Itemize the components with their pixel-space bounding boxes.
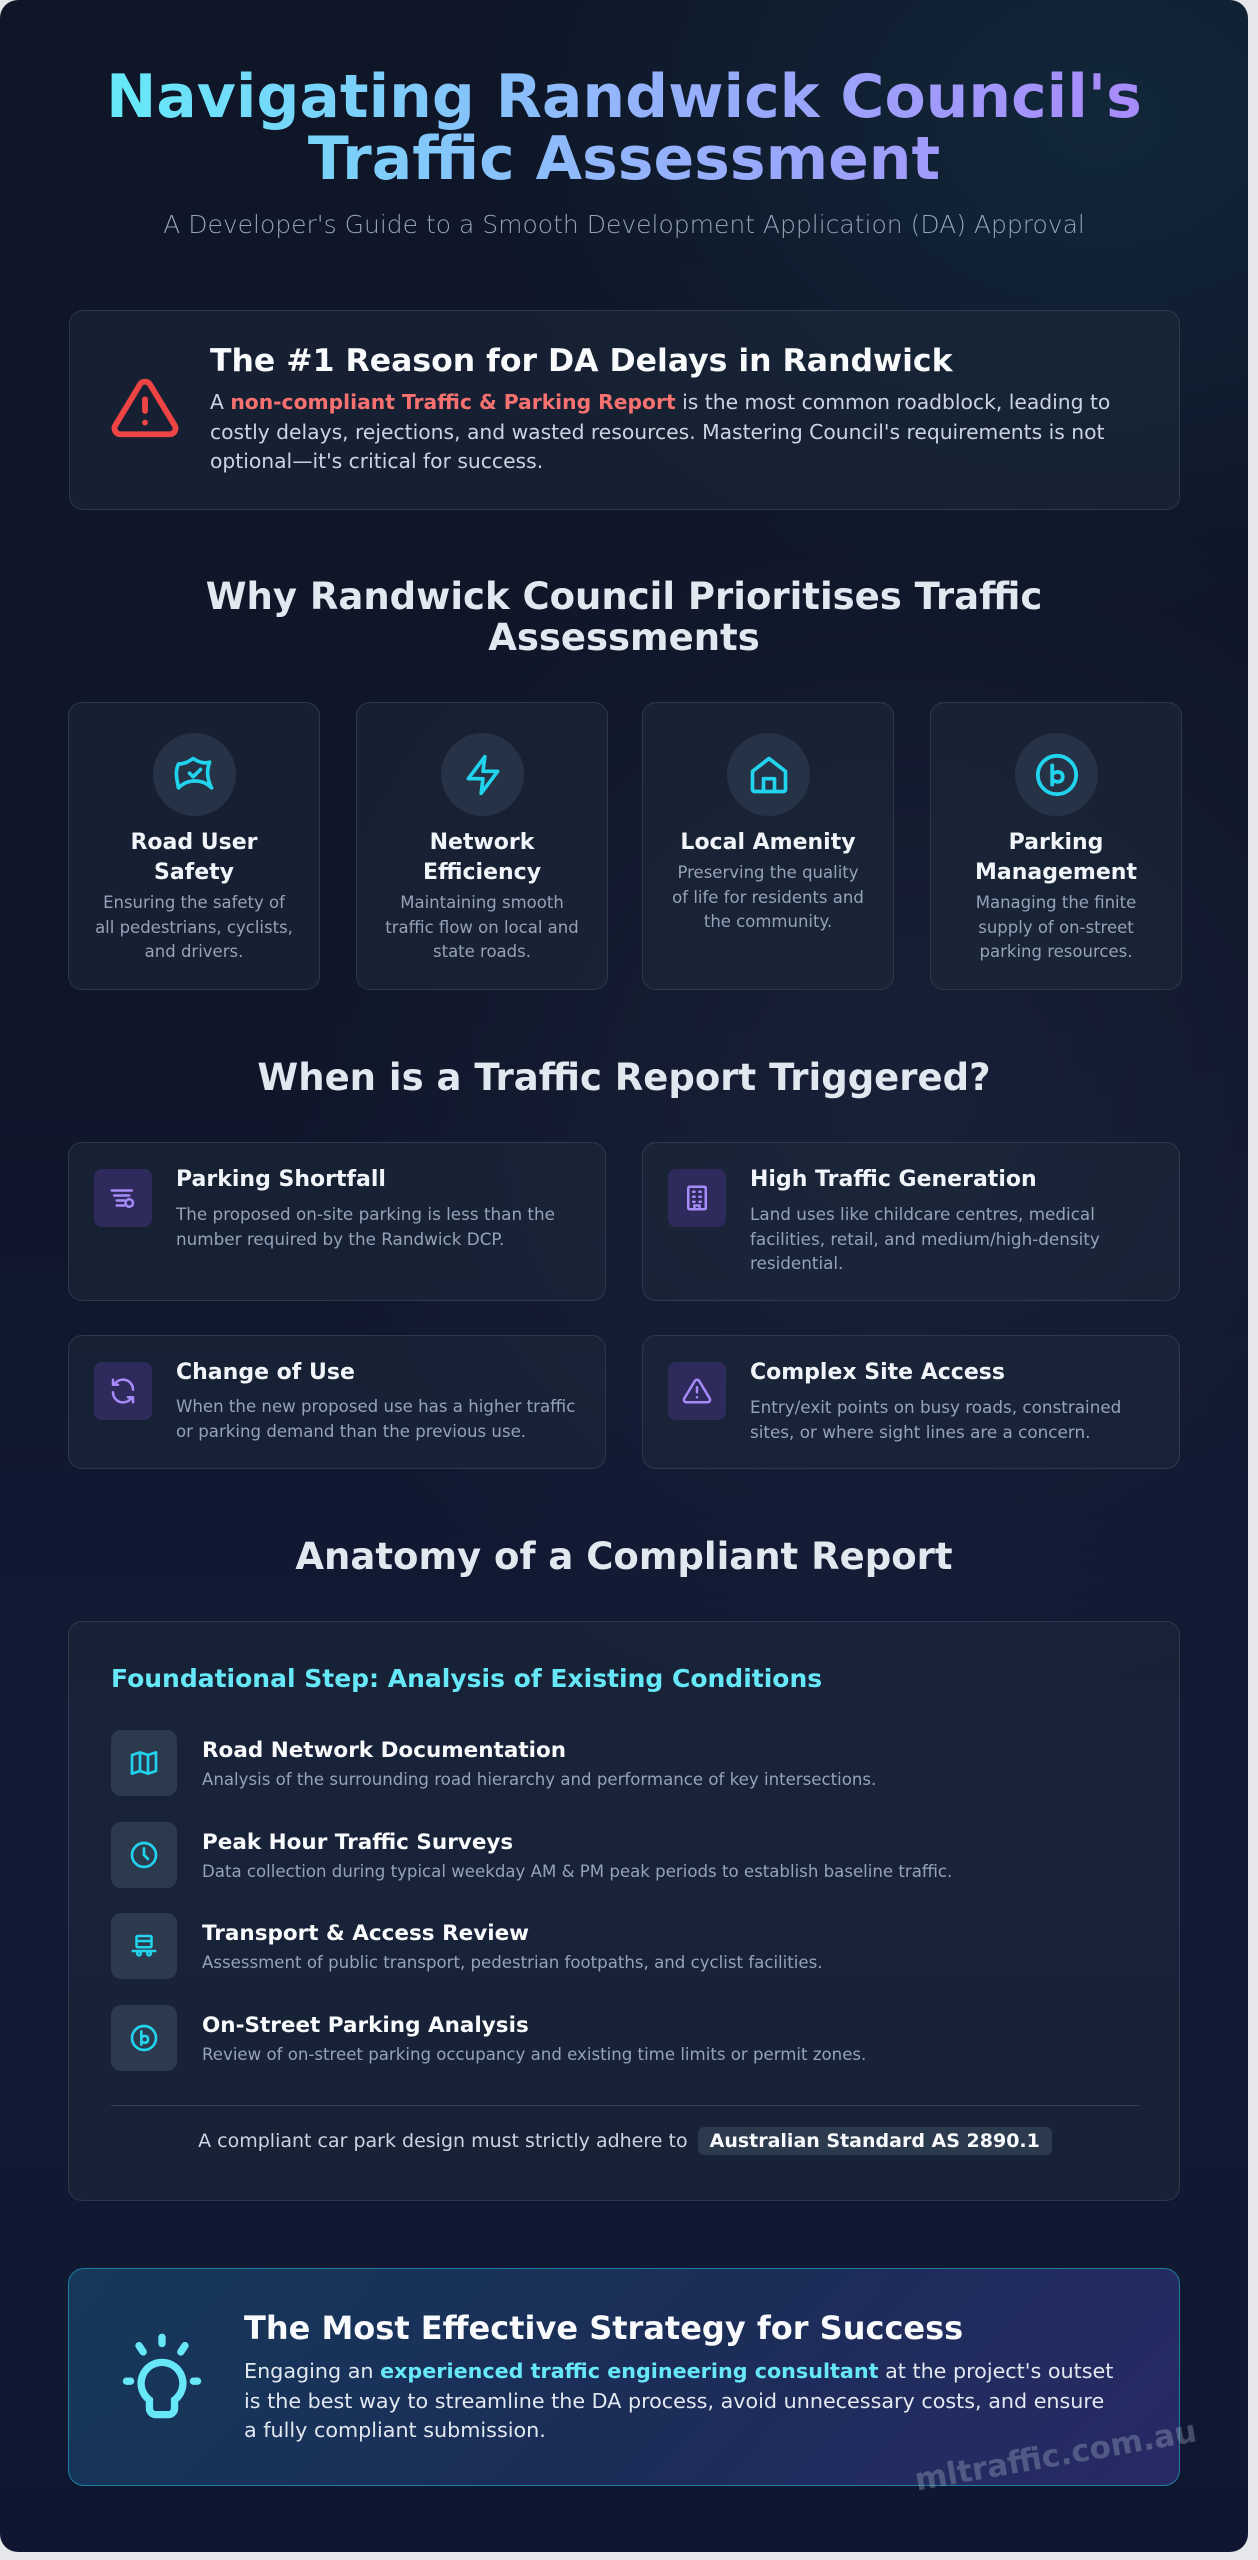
card: network efficiency <box>356 702 608 990</box>
trigger: change of use: Change of Use <box>176 1360 355 1385</box>
item: on-street parking <box>111 2005 866 2071</box>
heading: why: Why Randwick Council Prioritises Traffic <box>206 575 1042 618</box>
trigger: high traffic: Land uses like childcare centres, medical facilities, retail, and medium/high-density residential. <box>750 1204 1100 1273</box>
card: local amenity: Preserving the quality of life for residents and the community. <box>672 863 864 931</box>
card: network efficiency: Efficiency <box>423 860 541 885</box>
trigger: parking shortfall: Parking Shortfall <box>176 1167 386 1192</box>
card: local amenity <box>642 702 894 990</box>
title: Traffic Assessment <box>308 124 940 194</box>
alert text: A non-compliant Traffic & Parking Report is the most common roadblock, leading to costly delays, rejections, and wasted resources. Mastering Council's requirements is not optional—it's critical for success. <box>210 390 1110 473</box>
icon: building <box>668 1169 726 1227</box>
card: local amenity: Local Amenity <box>680 830 856 855</box>
card: parking management <box>930 702 1182 990</box>
item: on-street parking: Review of on-street parking occupancy and existing time limits or permit zones. <box>202 2045 866 2064</box>
trigger: change of use <box>68 1335 606 1469</box>
card: parking management: Management <box>975 860 1137 885</box>
trigger: change of use: When the new proposed use has a higher traffic or parking demand than the previous use. <box>176 1397 575 1440</box>
icon: bolt <box>441 733 524 816</box>
standard note <box>198 2127 1052 2155</box>
card: road user safety <box>68 702 320 990</box>
icon: house <box>727 733 810 816</box>
alert heading: The #1 Reason for DA Delays in Randwick <box>210 343 953 379</box>
item: road network: Analysis of the surrounding road hierarchy and performance of key intersections. <box>202 1770 876 1789</box>
heading: why <box>206 575 1042 659</box>
icon: alert <box>668 1362 726 1420</box>
panel subheading: Foundational Step: Analysis of Existing Conditions <box>111 1664 822 1693</box>
standard note: Australian Standard AS 2890.1 <box>710 2130 1040 2152</box>
item: road network: Road Network Documentation <box>202 1738 566 1763</box>
item: transport: Assessment of public transport, pedestrian footpaths, and cyclist facilities. <box>202 1953 823 1972</box>
icon: clock <box>111 1822 177 1888</box>
heading: triggers: When is a Traffic Report Triggered? <box>257 1056 991 1099</box>
trigger: parking shortfall: The proposed on-site parking is less than the number required by the Randwick DCP. <box>176 1204 555 1248</box>
heading: why: Assessments <box>488 616 760 659</box>
icon: map <box>111 1730 177 1796</box>
trigger: complex site access <box>642 1335 1180 1469</box>
card: road user safety: Safety <box>154 860 234 885</box>
card: road user safety: Road User <box>130 830 258 855</box>
icon: shield <box>153 733 236 816</box>
icon: parking shortfall <box>94 1169 152 1227</box>
card: parking management: Managing the finite supply of on-street parking resources. <box>976 893 1136 961</box>
card: parking management: Parking <box>1009 830 1103 855</box>
item: transport <box>111 1913 823 1979</box>
standard note: A compliant car park design must strictly adhere to <box>198 2130 688 2152</box>
icon: lightbulb <box>122 2334 202 2418</box>
item: peak hour: Peak Hour Traffic Surveys <box>202 1830 513 1855</box>
item: on-street parking: On-Street Parking Analysis <box>202 2013 529 2038</box>
item: peak hour: Data collection during typical weekday AM & PM peak periods to establish baseline traffic. <box>202 1862 952 1881</box>
title <box>0 66 1248 190</box>
trigger: parking shortfall <box>68 1142 606 1301</box>
item: transport: Transport & Access Review <box>202 1921 529 1946</box>
icon: parking <box>111 2005 177 2071</box>
trigger: high traffic <box>642 1142 1180 1301</box>
card: network efficiency: Network <box>430 830 534 855</box>
strategy heading: The Most Effective Strategy for Success <box>244 2309 963 2347</box>
icon: refresh <box>94 1362 152 1420</box>
card: network efficiency: Maintaining smooth traffic flow on local and state roads. <box>385 893 579 961</box>
watermark: mltraffic.com.au <box>912 2413 1199 2498</box>
item: road network <box>111 1730 876 1796</box>
icon: bus <box>111 1913 177 1979</box>
icon: parking <box>1015 733 1098 816</box>
trigger: high traffic: High Traffic Generation <box>750 1167 1037 1192</box>
trigger: complex site access: Entry/exit points on busy roads, constrained sites, or where sight lines are a concern. <box>750 1397 1121 1442</box>
subtitle: A Developer's Guide to a Smooth Development Application (DA) Approval <box>163 210 1085 239</box>
item: peak hour <box>111 1822 952 1888</box>
panel: existing conditions <box>68 1621 1180 2201</box>
card: road user safety: Ensuring the safety of all pedestrians, cyclists, and drivers. <box>95 893 293 961</box>
strategy text: Engaging an experienced traffic engineering consultant at the project's outset is the best way to streamline the DA process, avoid unnecessary costs, and ensure a fully compliant submission. <box>244 2359 1113 2442</box>
alert panel <box>69 310 1180 510</box>
heading: anatomy: Anatomy of a Compliant Report <box>295 1535 953 1578</box>
title: Navigating Randwick Council's <box>106 62 1142 132</box>
panel: strategy <box>68 2268 1180 2486</box>
trigger: complex site access: Complex Site Access <box>750 1360 1005 1385</box>
icon: warning <box>112 378 178 438</box>
